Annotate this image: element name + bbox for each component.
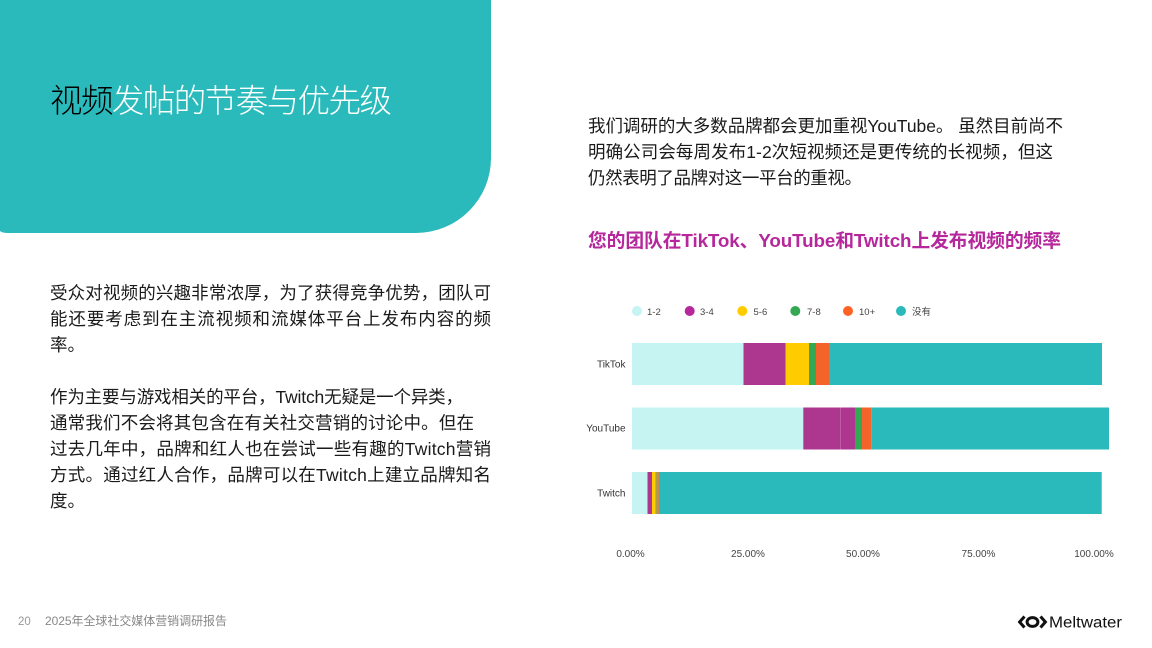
x axis labels: 75.00%	[962, 549, 996, 560]
title: 视频发帖的节奏与优先级	[50, 83, 392, 119]
text block: right intro: 我们调研的大多数品牌都会更加重视YouTube。 虽然目前尚不	[588, 116, 1063, 136]
text block: left intro: 能还要考虑到在主流视频和流媒体平台上发布内容的频	[50, 309, 491, 329]
text block: right intro	[588, 116, 1063, 188]
bar: Twitch	[597, 472, 1102, 514]
bar: TikTok: TikTok	[597, 360, 626, 370]
text block: left Twitch paragraph: 方式。通过红人合作，品牌可以在Twitch上建立品牌知名	[50, 465, 491, 485]
legend: 5-6	[754, 307, 767, 318]
text block: right intro: 仍然表明了品牌对这一平台的重视。	[588, 168, 862, 188]
panel: teal header	[0, 0, 491, 233]
text block: left Twitch paragraph: 过去几年中，品牌和红人也在尝试一些有趣的Twitch营销	[50, 439, 491, 459]
text block: left Twitch paragraph: 作为主要与游戏相关的平台，Twitch无疑是一个异类，	[50, 387, 463, 407]
x axis labels: 100.00%	[1074, 549, 1114, 560]
text block: right intro: 明确公司会每周发布1-2次短视频还是更传统的长视频，但这	[588, 142, 1053, 162]
legend: 10+	[859, 307, 876, 318]
logo: Meltwater: Meltwater	[1049, 614, 1122, 632]
logo: Meltwater	[1020, 614, 1122, 632]
footer page number: 20	[18, 616, 31, 628]
x axis labels: 25.00%	[731, 549, 765, 560]
legend: 1-2	[647, 307, 661, 318]
text block: left Twitch paragraph	[50, 387, 491, 511]
bar: TikTok	[597, 343, 1102, 385]
x axis labels: 50.00%	[846, 549, 880, 560]
text block: left intro	[50, 283, 491, 355]
x axis labels	[616, 549, 1114, 560]
text block: left Twitch paragraph: 通常我们不会将其包含在有关社交营销的讨论中。但在	[50, 413, 474, 433]
x axis labels: 0.00%	[616, 549, 645, 560]
bar: YouTube	[586, 408, 1109, 450]
text block: left Twitch paragraph: 度。	[50, 491, 85, 511]
legend: 7-8	[807, 307, 821, 318]
legend: 3-4	[700, 307, 714, 318]
legend	[632, 306, 931, 318]
footer report title: 2025年全球社交媒体营销调研报告	[45, 613, 227, 628]
bar: YouTube: YouTube	[586, 424, 626, 434]
legend: 没有	[912, 306, 931, 318]
text block: left intro: 率。	[50, 335, 85, 355]
text block: left intro: 受众对视频的兴趣非常浓厚，为了获得竞争优势，团队可	[50, 283, 491, 303]
bar: Twitch: Twitch	[597, 488, 626, 500]
chart heading: 您的团队在TikTok、YouTube和Twitch上发布视频的频率	[588, 229, 1061, 251]
